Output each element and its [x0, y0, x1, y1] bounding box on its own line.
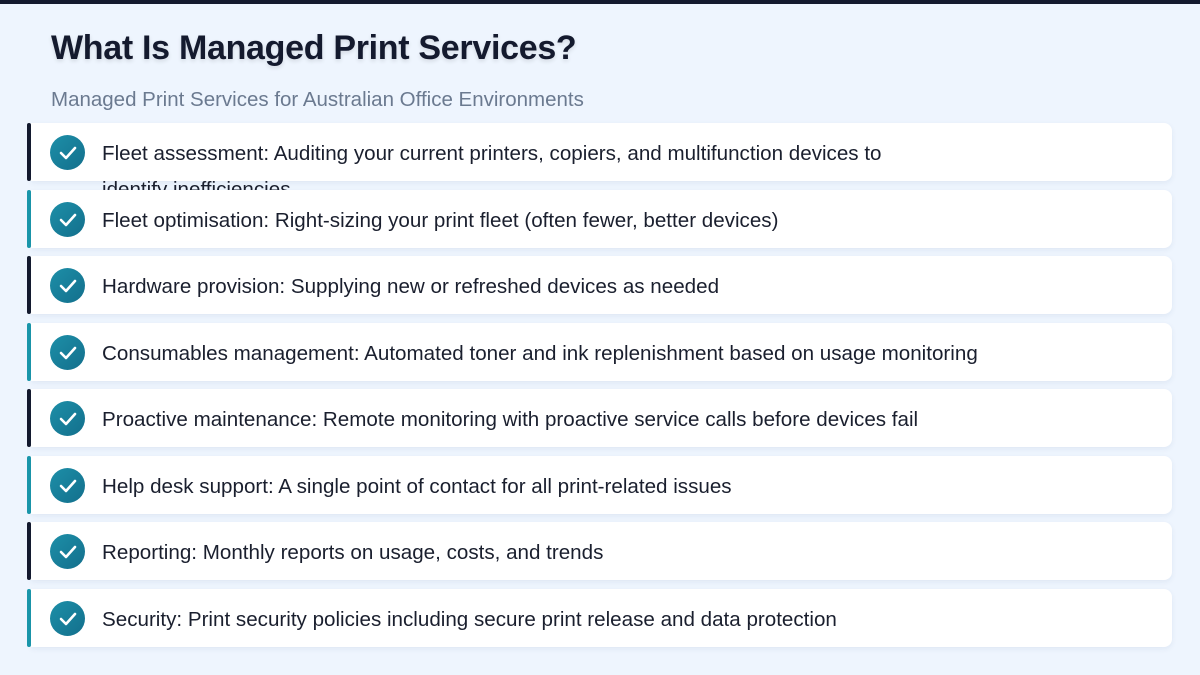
icon: check: [50, 468, 85, 503]
text: Reporting: Monthly reports on usage, costs, and trends: [102, 541, 603, 564]
item: help desk support: [27, 456, 1172, 516]
title: What Is Managed Print Services?: [51, 29, 576, 67]
icon: check: [50, 268, 85, 303]
icon: check: [50, 335, 85, 370]
item: proactive maintenance: [27, 389, 1172, 448]
text: Fleet optimisation: Right-sizing your print fleet (often fewer, better devices): [102, 209, 778, 232]
item: security: [27, 589, 1172, 648]
icon: check: [50, 534, 85, 569]
text: Help desk support: A single point of contact for all print-related issues: [102, 475, 732, 498]
icon: check: [50, 202, 85, 237]
item: consumables management: [27, 323, 1172, 382]
text: Fleet assessment: Auditing your current printers, copiers, and multifunction devices to identify inefficiencies: [102, 142, 882, 201]
icon: check: [50, 401, 85, 436]
text: Consumables management: Automated toner and ink replenishment based on usage monitoring: [102, 342, 978, 365]
icon: check: [50, 135, 85, 170]
item: reporting: [27, 522, 1172, 582]
item: hardware provision: [27, 256, 1172, 316]
text: Proactive maintenance: Remote monitoring with proactive service calls before devices fail: [102, 408, 918, 431]
item: fleet optimisation: [27, 190, 1172, 250]
icon: check: [50, 601, 85, 636]
item: fleet assessment: [27, 123, 1172, 201]
subtitle: Managed Print Services for Australian Office Environments: [51, 88, 584, 111]
text: Security: Print security policies including secure print release and data protection: [102, 608, 837, 631]
text: Hardware provision: Supplying new or refreshed devices as needed: [102, 275, 719, 298]
